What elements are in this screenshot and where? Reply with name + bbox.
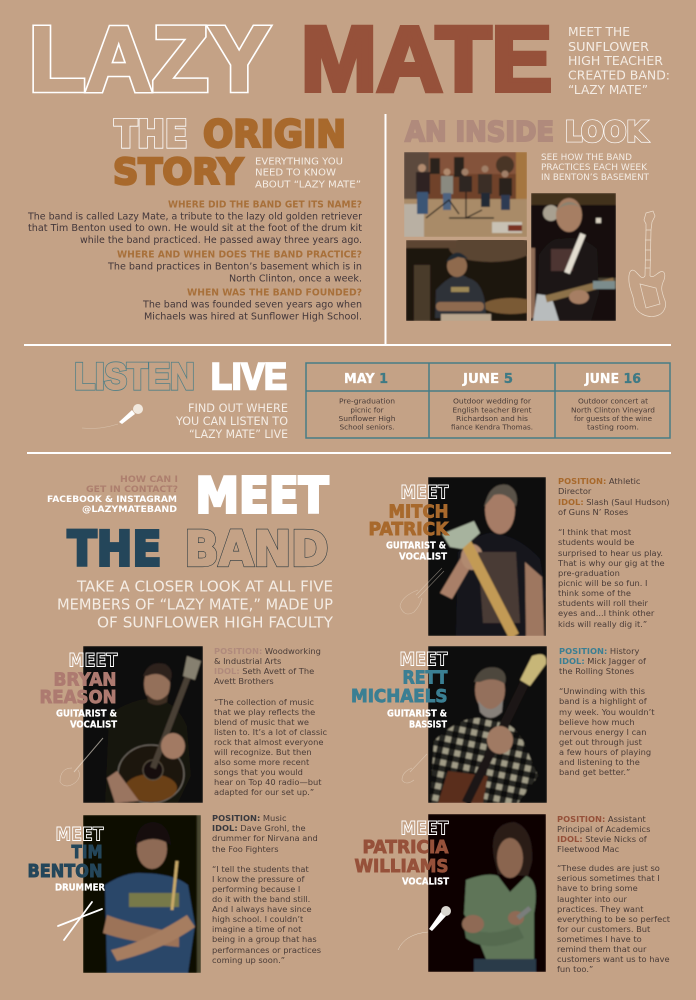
member bio: performing because I bbox=[212, 884, 300, 894]
listen live caption: YOU CAN LISTEN TO bbox=[175, 414, 288, 428]
subtitle: MEET THE bbox=[568, 25, 630, 39]
icon: drumsticks bbox=[58, 902, 102, 940]
member bio: do it with the band still. bbox=[212, 894, 310, 904]
question: founded: The band was founded seven years ago when bbox=[142, 300, 362, 310]
question: band name: The band is called Lazy Mate, a tribute to the lazy old golden retriever bbox=[27, 212, 363, 222]
heading: the origin story: THE bbox=[114, 113, 188, 156]
member bio: have to bring some bbox=[557, 883, 638, 893]
heading: meet the band: MEET bbox=[196, 468, 329, 524]
table cell: May 1: MAY 1 bbox=[344, 371, 388, 387]
member bio: “I tell the students that bbox=[212, 864, 310, 874]
member name: GUITARIST & bbox=[56, 708, 117, 720]
member name bbox=[368, 482, 449, 562]
heading: listen live: LIVE bbox=[211, 356, 287, 397]
panel: contact details: @LAZYMATEBAND bbox=[82, 505, 177, 515]
member bio: that we play reflects the bbox=[214, 707, 315, 717]
member bio: IDOL: bbox=[212, 823, 238, 833]
table cell: June 5: JUNE 5 bbox=[462, 371, 513, 387]
icon: guitar bbox=[60, 738, 103, 786]
member: Rett Michaels bbox=[351, 646, 657, 803]
member bio: Seth Avett of The bbox=[242, 666, 314, 676]
member bio: “The collection of music bbox=[214, 697, 314, 707]
member bio: “I think that most bbox=[558, 527, 632, 537]
question: band name: WHERE DID THE BAND GET ITS NAME? bbox=[168, 200, 362, 210]
panel: listen live bbox=[74, 356, 670, 441]
member bio: IDOL: bbox=[214, 666, 240, 676]
member bio: Music bbox=[263, 813, 287, 823]
member bio: also some more recent bbox=[214, 757, 310, 767]
member bio: eyes and...I think other bbox=[558, 608, 655, 618]
member name: VOCALIST bbox=[402, 876, 449, 888]
member bio: IDOL: bbox=[558, 497, 584, 507]
inside look caption: IN BENTON’S BASEMENT bbox=[541, 173, 650, 183]
member name bbox=[351, 650, 448, 730]
member name: GUITARIST & bbox=[387, 708, 447, 720]
origin subheading: EVERYTHING YOU bbox=[255, 156, 343, 168]
table cell: May 1: Sunflower High bbox=[338, 414, 396, 423]
member: Tim Benton bbox=[28, 813, 324, 973]
heading: listen live bbox=[74, 356, 287, 397]
member bio: songs that you would bbox=[214, 767, 303, 777]
subtitle: SUNFLOWER bbox=[568, 40, 649, 54]
inside look caption: SEE HOW THE BAND bbox=[541, 153, 632, 163]
member bio: I know the pressure of bbox=[212, 874, 305, 884]
member bio: high school. I couldn’t bbox=[212, 914, 304, 924]
member bio: Principal of Academics bbox=[557, 824, 650, 834]
member bio: and listening to the bbox=[559, 757, 640, 767]
listen live caption bbox=[175, 401, 288, 441]
question: practice bbox=[107, 250, 362, 284]
member bio: And I always have since bbox=[212, 904, 312, 914]
member name: VOCALIST bbox=[399, 552, 447, 562]
question: band name: that Tim Benton used to own. He would sit at the foot of the drum kit bbox=[28, 223, 362, 234]
question: practice: WHERE AND WHEN DOES THE BAND PRACTICE? bbox=[117, 250, 362, 260]
photo: Bryan Reason bbox=[83, 646, 203, 803]
member name: MEET bbox=[400, 818, 449, 840]
member name: MITCH bbox=[388, 502, 448, 522]
member bio: blend of music that we bbox=[214, 717, 309, 727]
table cell: June 16: North Clinton Vineyard bbox=[571, 406, 655, 414]
origin subheading: NEED TO KNOW bbox=[255, 168, 336, 178]
member bio: Avett Brothers bbox=[214, 676, 274, 686]
table cell: June 5: Outdoor wedding for bbox=[453, 396, 531, 406]
member name bbox=[40, 650, 118, 730]
member bio: pre-graduation bbox=[558, 568, 620, 578]
title: Lazy Mate bbox=[29, 8, 552, 110]
title: Lazy Mate: LAZY bbox=[29, 8, 270, 110]
member bio: surprised to hear us play. bbox=[558, 548, 663, 558]
member name: DRUMMER bbox=[55, 882, 106, 894]
member bio: hear on Top 40 radio—but bbox=[214, 777, 322, 787]
member bio: students would be bbox=[558, 537, 634, 547]
meet the band intro: TAKE A CLOSER LOOK AT ALL FIVE bbox=[76, 578, 333, 596]
member name: WILLIAMS bbox=[354, 856, 448, 877]
listen live caption: FIND OUT WHERE bbox=[188, 401, 288, 415]
origin subheading: ABOUT “LAZY MATE” bbox=[255, 180, 361, 190]
member bio: POSITION: bbox=[559, 646, 607, 656]
member bio: the Foo Fighters bbox=[212, 844, 279, 854]
member bio: being in a group that has bbox=[212, 934, 317, 944]
member bio: POSITION: bbox=[214, 646, 262, 656]
heading: meet the band: THE bbox=[68, 522, 162, 578]
member bio: a few hours of playing bbox=[559, 747, 651, 757]
inside look caption bbox=[541, 153, 650, 183]
member name: RETT bbox=[402, 668, 448, 688]
table cell: June 5: fiance Kendra Thomas. bbox=[451, 422, 533, 432]
panel: contact details: GET IN CONTACT? bbox=[86, 485, 178, 495]
photo: Patricia Williams bbox=[428, 814, 546, 972]
table cell: June 5 bbox=[451, 371, 533, 432]
member bio: serious sometimes that I bbox=[557, 873, 660, 883]
subtitle: “LAZY MATE” bbox=[568, 83, 648, 97]
icon: guitar outline bbox=[402, 754, 427, 783]
member name: PATRICK bbox=[368, 519, 449, 540]
member bio: POSITION: bbox=[212, 813, 260, 823]
panel: contact details: HOW CAN I bbox=[120, 475, 178, 485]
table cell: June 16: Outdoor concert at bbox=[578, 396, 648, 406]
table cell: June 16 bbox=[571, 371, 655, 432]
panel: the origin story bbox=[27, 113, 363, 322]
member name: TIM bbox=[72, 842, 102, 863]
photo: band practising in basement bbox=[404, 152, 527, 237]
member bio: believe how much bbox=[559, 717, 635, 727]
member bio: Athletic bbox=[609, 476, 640, 486]
meet the band intro: MEMBERS OF “LAZY MATE,” MADE UP bbox=[57, 596, 333, 614]
schedule table bbox=[306, 363, 670, 438]
member name: MEET bbox=[400, 482, 449, 504]
member bio: Director bbox=[558, 486, 592, 496]
member bio: History bbox=[610, 646, 639, 656]
member bio: remind them that our bbox=[557, 944, 647, 954]
member bio: Stevie Nicks of bbox=[585, 834, 647, 844]
heading: meet the band: BAND bbox=[184, 522, 328, 578]
table cell: June 16: tasting room. bbox=[587, 422, 639, 432]
member name bbox=[28, 824, 106, 894]
heading: the origin story: THE bbox=[114, 113, 188, 156]
question: founded bbox=[142, 288, 362, 322]
question: band name: while the band practiced. He passed away three years ago. bbox=[80, 235, 362, 246]
member bio: laughter into our bbox=[557, 894, 627, 904]
member name: PATRICIA bbox=[362, 837, 449, 858]
heading: the origin story: STORY bbox=[113, 152, 244, 193]
member bio: students will roll their bbox=[558, 598, 648, 608]
table cell: June 16: JUNE 16 bbox=[584, 371, 641, 387]
icon: microphone bbox=[398, 906, 451, 950]
member bio: performances or practices bbox=[212, 945, 321, 955]
member name: MEET bbox=[56, 824, 104, 846]
member bio: listen to. It’s a lot of classic bbox=[214, 727, 327, 737]
member bio: Mick Jagger of bbox=[587, 656, 646, 666]
panel: contact details: FACEBOOK & INSTAGRAM bbox=[47, 495, 177, 505]
member bio: IDOL: bbox=[559, 656, 585, 666]
inside look caption: PRACTICES EACH WEEK bbox=[541, 163, 647, 173]
member bio: customers want us to have bbox=[557, 954, 670, 964]
member bio: POSITION: bbox=[558, 476, 606, 486]
meet the band intro bbox=[57, 578, 334, 632]
heading: an inside look: LOOK bbox=[565, 115, 648, 148]
icon: guitar outline bbox=[400, 568, 444, 614]
member name: MEET bbox=[68, 650, 118, 672]
heading: listen live: LISTEN bbox=[74, 356, 194, 397]
member bio: rock that almost everyone bbox=[214, 737, 323, 747]
meet the band intro: OF SUNFLOWER HIGH FACULTY bbox=[97, 614, 334, 632]
subtitle bbox=[568, 25, 670, 97]
question: founded: Michaels was hired at Sunflower High School. bbox=[144, 312, 362, 322]
heading: meet the band: BAND bbox=[184, 522, 328, 578]
table cell: May 1: Pre-graduation bbox=[339, 396, 395, 406]
member bio: “These dudes are just so bbox=[557, 863, 660, 873]
member name: GUITARIST & bbox=[386, 540, 446, 552]
member name: REASON bbox=[40, 687, 116, 708]
title: Lazy Mate: MATE bbox=[301, 8, 552, 110]
member: Patricia Williams bbox=[354, 814, 673, 974]
table cell: May 1 bbox=[338, 371, 396, 432]
member bio: picnic will be so fun. I bbox=[558, 578, 647, 588]
icon: microphone bbox=[82, 404, 143, 428]
member name bbox=[354, 818, 449, 888]
member name: VOCALIST bbox=[70, 720, 117, 730]
member bio: fun too.” bbox=[557, 964, 593, 974]
member bio: practices. They want bbox=[557, 904, 644, 914]
member bio: coming up soon.” bbox=[212, 955, 285, 965]
member bio: Slash (Saul Hudson) bbox=[586, 497, 670, 507]
photo: Mitch Patrick bbox=[428, 477, 546, 636]
heading: meet the band bbox=[68, 468, 329, 578]
origin subheading bbox=[255, 156, 361, 190]
heading: an inside look: AN INSIDE bbox=[405, 115, 554, 148]
member bio: my week. You wouldn’t bbox=[559, 707, 655, 717]
member bio: nervous energy I can bbox=[559, 727, 647, 737]
member bio: sometimes I have to bbox=[557, 934, 642, 944]
member: Mitch Patrick bbox=[368, 476, 672, 636]
question: practice: The band practices in Benton’s basement which is in bbox=[107, 262, 362, 272]
member name: BENTON bbox=[28, 861, 102, 882]
listen live caption: “LAZY MATE” LIVE bbox=[189, 427, 288, 441]
member bio: “Unwinding with this bbox=[559, 686, 645, 696]
subtitle: CREATED BAND: bbox=[568, 68, 670, 82]
question: founded: WHEN WAS THE BAND FOUNDED? bbox=[187, 288, 362, 298]
icon: electric guitar outline bbox=[629, 211, 666, 316]
member bio: Fleetwood Mac bbox=[557, 844, 620, 854]
table cell: June 16: for guests of the wine bbox=[574, 414, 653, 423]
panel: an inside look bbox=[404, 115, 666, 321]
photo: guitarist bbox=[531, 193, 616, 321]
heading: an inside look: LOOK bbox=[565, 115, 648, 148]
member bio: think some of the bbox=[558, 588, 631, 598]
photo: Rett Michaels bbox=[428, 646, 547, 803]
member bio: IDOL: bbox=[557, 834, 583, 844]
member bio: adapted for our set up.” bbox=[214, 787, 314, 797]
member bio: kids will really dig it.” bbox=[558, 619, 647, 629]
member bio: everything to be so perfect bbox=[557, 914, 671, 924]
member bio: of Guns N’ Roses bbox=[558, 507, 628, 517]
table cell: May 1: School seniors. bbox=[340, 422, 394, 432]
member bio: band is a highlight of bbox=[559, 696, 648, 706]
heading: listen live: LISTEN bbox=[74, 356, 194, 397]
member name: BASSIST bbox=[409, 720, 447, 730]
member bio: Assistant bbox=[608, 814, 646, 824]
member bio: band get better.” bbox=[559, 767, 630, 777]
table cell: June 5: Richardson and his bbox=[456, 414, 528, 423]
member bio: for our customers. But bbox=[557, 924, 651, 934]
member bio: & Industrial Arts bbox=[214, 656, 281, 666]
member: Bryan Reason bbox=[40, 646, 330, 803]
panel: contact details bbox=[47, 475, 178, 515]
member bio: Woodworking bbox=[265, 646, 321, 656]
question: practice: North Clinton, once a week. bbox=[229, 274, 362, 284]
member bio: the Rolling Stones bbox=[559, 666, 634, 676]
table cell: June 5: English teacher Brent bbox=[452, 406, 532, 414]
question: band name bbox=[27, 200, 363, 246]
member bio: drummer for Nirvana and bbox=[212, 833, 318, 843]
title: Lazy Mate: LAZY bbox=[29, 8, 270, 110]
photo: Tim Benton bbox=[83, 815, 201, 973]
member name: MICHAELS bbox=[351, 686, 448, 707]
member bio: get out through just bbox=[559, 737, 643, 747]
member name: MEET bbox=[400, 650, 448, 670]
member bio: That is why our gig at the bbox=[557, 558, 665, 568]
table cell: May 1: picnic for bbox=[350, 406, 384, 414]
heading: an inside look bbox=[405, 115, 648, 148]
member bio: imagine a time of not bbox=[212, 924, 302, 934]
member name: BRYAN bbox=[54, 670, 116, 690]
heading: the origin story: ORIGIN bbox=[203, 113, 346, 156]
member bio: Dave Grohl, the bbox=[240, 823, 306, 833]
member bio: POSITION: bbox=[557, 814, 605, 824]
heading: the origin story bbox=[113, 113, 346, 193]
subtitle: HIGH TEACHER bbox=[568, 54, 663, 68]
member bio: will recognize. But then bbox=[214, 747, 312, 757]
photo: drummer bbox=[406, 240, 527, 321]
